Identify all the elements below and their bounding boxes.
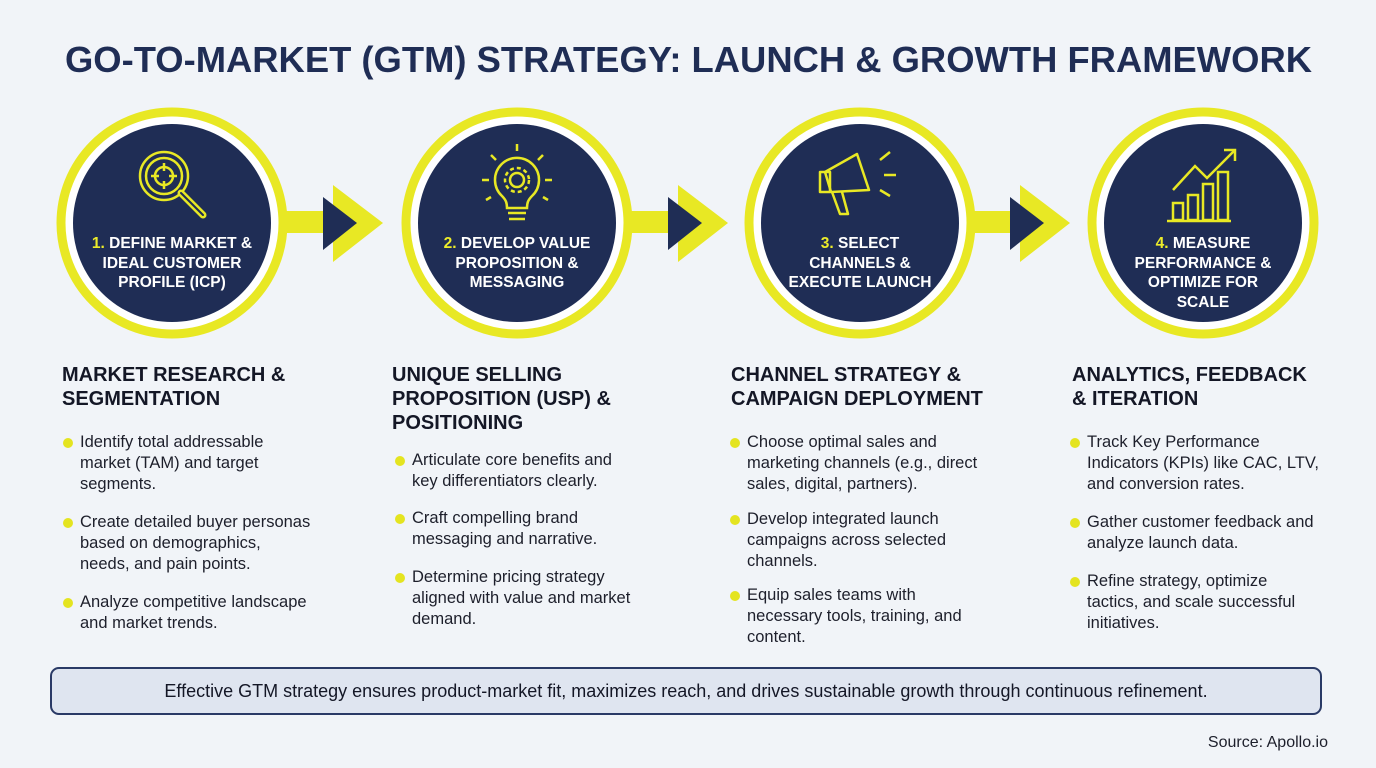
text: demand. bbox=[412, 610, 476, 628]
text: based on demographics, bbox=[80, 534, 261, 552]
text: aligned with value and market bbox=[412, 589, 630, 607]
text: initiatives. bbox=[1087, 614, 1159, 632]
icon: magnifier target bbox=[140, 152, 203, 215]
arrow 3 bbox=[968, 185, 1070, 262]
heading col 4: ANALYTICS, FEEDBACK bbox=[1072, 364, 1307, 386]
circle label 3: 3. SELECT bbox=[821, 235, 899, 252]
text: Choose optimal sales and bbox=[747, 433, 937, 451]
text: Determine pricing strategy bbox=[412, 568, 605, 586]
circle label 2: 2. DEVELOP VALUE bbox=[444, 235, 590, 252]
arrow 1 bbox=[280, 185, 383, 262]
heading col 2: PROPOSITION (USP) & bbox=[392, 388, 611, 410]
text: and market trends. bbox=[80, 614, 218, 632]
text: content. bbox=[747, 628, 806, 646]
text: tactics, and scale successful bbox=[1087, 593, 1295, 611]
circle label 2 bbox=[444, 235, 590, 291]
circle label 1: IDEAL CUSTOMER bbox=[103, 254, 241, 272]
circle 3 bbox=[749, 112, 971, 334]
text: and conversion rates. bbox=[1087, 475, 1245, 493]
heading col 1: MARKET RESEARCH & bbox=[62, 364, 285, 386]
circle label 3: EXECUTE LAUNCH bbox=[789, 274, 931, 291]
heading col 1 bbox=[62, 364, 285, 410]
heading col 4: & ITERATION bbox=[1072, 388, 1198, 410]
text: Develop integrated launch bbox=[747, 510, 939, 528]
text: Craft compelling brand bbox=[412, 509, 578, 527]
heading col 2 bbox=[392, 364, 611, 434]
arrow 2 bbox=[625, 185, 728, 262]
text: Track Key Performance bbox=[1087, 433, 1260, 451]
circle 2 bbox=[406, 112, 628, 334]
circle label 2: PROPOSITION & bbox=[455, 254, 579, 272]
text: market (TAM) and target bbox=[80, 454, 258, 472]
text: sales, digital, partners). bbox=[747, 475, 918, 493]
bullets col 3 bbox=[730, 433, 978, 646]
heading col 3: CHANNEL STRATEGY & bbox=[731, 364, 961, 386]
circle label 2: MESSAGING bbox=[470, 274, 564, 291]
circle label 4: 4. MEASURE bbox=[1156, 235, 1250, 252]
circle label 4 bbox=[1135, 235, 1271, 310]
process diagram bbox=[56, 108, 1318, 338]
heading col 2: UNIQUE SELLING bbox=[392, 364, 562, 386]
circle label 4: PERFORMANCE & bbox=[1135, 254, 1271, 272]
heading col 3: CAMPAIGN DEPLOYMENT bbox=[731, 388, 983, 410]
text: campaigns across selected bbox=[747, 531, 946, 549]
bullets col 4 bbox=[1070, 433, 1319, 632]
circle label 3: CHANNELS & bbox=[809, 254, 911, 272]
heading col 1: SEGMENTATION bbox=[62, 388, 220, 410]
bullets col 1 bbox=[63, 433, 310, 632]
text: Articulate core benefits and bbox=[412, 451, 612, 469]
text: channels. bbox=[747, 552, 818, 570]
text: marketing channels (e.g., direct bbox=[747, 454, 977, 472]
icon: lightbulb gear bbox=[482, 144, 552, 219]
text: needs, and pain points. bbox=[80, 555, 251, 573]
text: Gather customer feedback and bbox=[1087, 513, 1314, 531]
bullets col 2 bbox=[395, 451, 630, 628]
circle label 3 bbox=[789, 235, 931, 291]
text: segments. bbox=[80, 475, 156, 493]
circle 1 bbox=[61, 112, 283, 334]
circle label 4: OPTIMIZE FOR bbox=[1148, 274, 1258, 291]
source: Source: Apollo.io bbox=[1208, 734, 1328, 751]
text: Analyze competitive landscape bbox=[80, 593, 307, 611]
text: Indicators (KPIs) like CAC, LTV, bbox=[1087, 454, 1319, 472]
icon: megaphone bbox=[820, 152, 896, 214]
circle label 4: SCALE bbox=[1177, 294, 1229, 310]
icon: bar chart growth bbox=[1167, 150, 1235, 221]
text: messaging and narrative. bbox=[412, 530, 597, 548]
circle 4 bbox=[1092, 112, 1314, 334]
heading col 3 bbox=[731, 364, 983, 410]
text: necessary tools, training, and bbox=[747, 607, 962, 625]
circle label 1 bbox=[92, 235, 252, 291]
text: key differentiators clearly. bbox=[412, 472, 598, 490]
circle label 1: 1. DEFINE MARKET & bbox=[92, 235, 252, 252]
heading col 2: POSITIONING bbox=[392, 412, 523, 434]
text: Identify total addressable bbox=[80, 433, 263, 451]
summary callout: Effective GTM strategy ensures product-market fit, maximizes reach, and drives sustainable growth through continuous refinement. bbox=[164, 681, 1208, 701]
text: analyze launch data. bbox=[1087, 534, 1238, 552]
title: GO-TO-MARKET (GTM) STRATEGY: LAUNCH & GROWTH FRAMEWORK bbox=[65, 39, 1312, 80]
heading col 4 bbox=[1072, 364, 1307, 410]
circle label 1: PROFILE (ICP) bbox=[118, 274, 226, 291]
text: Create detailed buyer personas bbox=[80, 513, 310, 531]
text: Equip sales teams with bbox=[747, 586, 916, 604]
text: Refine strategy, optimize bbox=[1087, 572, 1267, 590]
summary callout bbox=[50, 667, 1322, 715]
